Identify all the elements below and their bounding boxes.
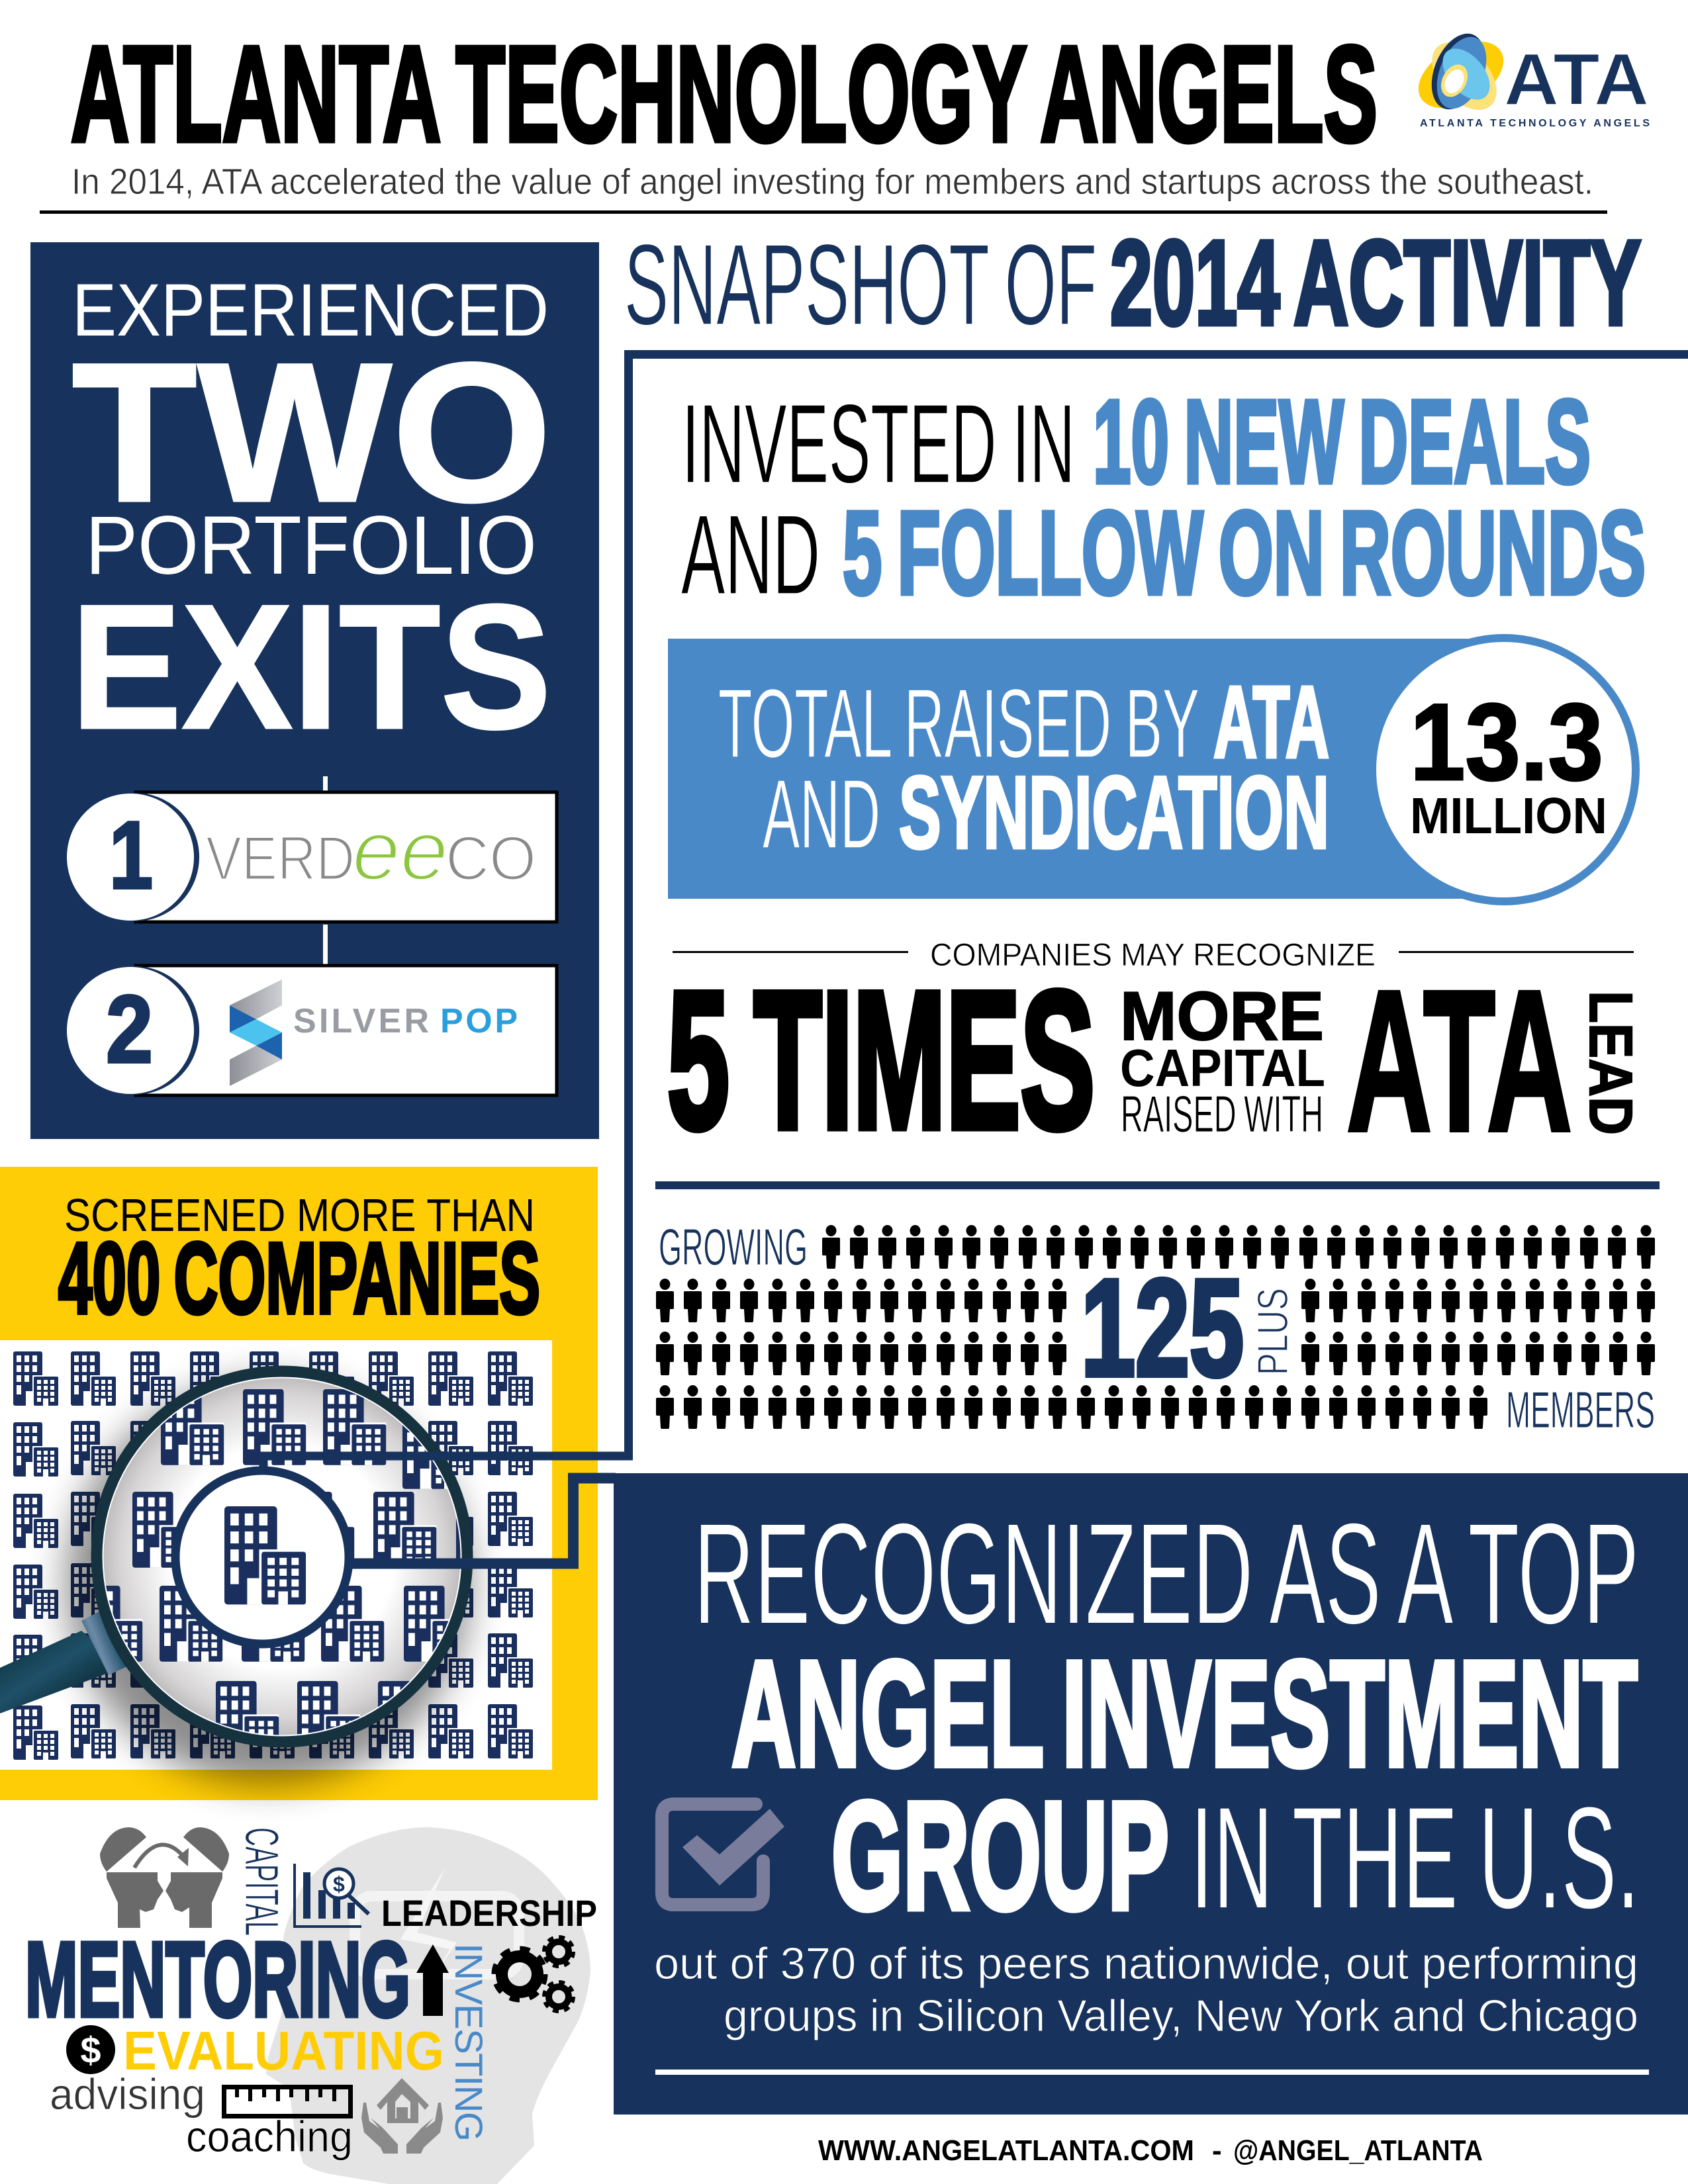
heading: screened more than 400 companies: SCREENED MORE THAN xyxy=(64,1189,535,1241)
exit 1: Verdeeco: VERD xyxy=(206,823,355,893)
connector: frame to magnifier xyxy=(263,355,1688,1473)
magnifying glass xyxy=(0,1371,519,1785)
icon: ruler xyxy=(224,2087,351,2116)
band: total raised: ATA xyxy=(1213,665,1329,779)
icon: dollar coin xyxy=(66,2025,115,2074)
pictogram: growing 125 plus members: GROWING xyxy=(659,1218,808,1276)
icon: checkbox xyxy=(662,1804,784,1905)
word cloud: mentoring: EVALUATING xyxy=(123,2020,444,2081)
people row 3 xyxy=(656,1332,1655,1375)
subtitle: In 2014, ATA accelerated the value of angel investing for members and startups across the southeast. xyxy=(71,161,1593,202)
icon: two heads exchange xyxy=(100,1827,229,1928)
footer: @ANGEL_ATLANTA xyxy=(1233,2134,1483,2167)
stat: 13.3 million: 13.3 xyxy=(1410,681,1603,803)
icon: chart with dollar magnifier: $ xyxy=(333,1872,345,1896)
word cloud: mentoring: INVESTING xyxy=(447,1943,490,2142)
heading: experienced two portfolio exits: EXPERIENCED xyxy=(72,269,549,351)
exit 2: Silverpop: SILVER xyxy=(293,1002,429,1040)
connector: lens to recognition panel xyxy=(344,1479,616,1563)
stat: 5 times more capital: CAPITAL xyxy=(1120,1038,1325,1097)
panel: recognized as a top angel investment group xyxy=(614,1473,1688,2115)
icon: head silhouette xyxy=(266,1827,590,2184)
logo: ATA: ATLANTA TECHNOLOGY ANGELS xyxy=(1420,118,1650,129)
logo: ATA: ATA xyxy=(1504,39,1649,120)
pictogram: growing 125 plus members xyxy=(656,1218,1655,1439)
panel: screened companies xyxy=(0,1167,598,1800)
people row 1 xyxy=(822,1225,1655,1269)
panel: two portfolio exits xyxy=(30,242,599,1139)
icon: dollar coin: $ xyxy=(80,2029,101,2071)
pictogram: growing 125 plus members: PLUS xyxy=(1248,1288,1297,1375)
panel: recognized as a top angel investment group: out of 370 of its peers nationwide, out performing xyxy=(654,1938,1638,1989)
stat: 5 times more capital: COMPANIES MAY RECOGNIZE xyxy=(930,938,1376,973)
panel: recognized as a top angel investment group: groups in Silicon Valley, New York and Chicago xyxy=(724,1991,1638,2041)
logo: ATA xyxy=(1407,26,1650,129)
people row 4 xyxy=(656,1385,1487,1429)
stat: 13.3 million: MILLION xyxy=(1410,788,1607,844)
heading: snapshot of 2014 activity: SNAPSHOT OF xyxy=(624,220,1097,349)
icon: gears xyxy=(494,1937,573,2011)
word cloud: mentoring: advising xyxy=(50,2070,205,2118)
heading: experienced two portfolio exits xyxy=(71,269,552,766)
text: invested in new deals and follow on rounds: AND xyxy=(681,492,820,618)
word cloud: mentoring: LEADERSHIP xyxy=(381,1892,597,1934)
exit 2: Silverpop: POP xyxy=(440,1002,518,1040)
exit 2: Silverpop xyxy=(67,966,557,1095)
footer: WWW.ANGELATLANTA.COM xyxy=(818,2134,1194,2167)
building grid xyxy=(13,1351,533,1760)
band: total raised: SYNDICATION xyxy=(899,755,1329,870)
heading: experienced two portfolio exits: TWO xyxy=(71,321,552,543)
icon: chart with dollar magnifier xyxy=(295,1864,369,1927)
panel: recognized as a top angel investment group: GROUP xyxy=(831,1770,1169,1942)
word cloud: mentoring: MENTORING xyxy=(25,1920,410,2038)
footer xyxy=(818,2134,1483,2167)
icon: house in hands xyxy=(361,2078,443,2154)
footer: - xyxy=(1212,2134,1222,2167)
word cloud: mentoring: CAPITAL xyxy=(235,1827,287,1936)
heading: experienced two portfolio exits: PORTFOLIO xyxy=(85,500,537,592)
stat: 5 times more capital: RAISED WITH xyxy=(1121,1085,1323,1143)
exit 1: Verdeeco xyxy=(67,792,557,922)
heading: screened more than 400 companies: 400 COMPANIES xyxy=(58,1222,540,1335)
exit 1: Verdeeco: CO xyxy=(445,823,536,893)
people row 2 xyxy=(656,1279,1655,1322)
heading: experienced two portfolio exits: EXITS xyxy=(71,567,551,766)
band: total raised: TOTAL RAISED BY xyxy=(718,669,1199,778)
heading: screened more than 400 companies xyxy=(58,1189,540,1335)
band: total raised: AND xyxy=(763,760,880,869)
exit 2: Silverpop: 2 xyxy=(106,976,153,1083)
icon: up arrow xyxy=(416,1944,449,2016)
pictogram: growing 125 plus members: 125 xyxy=(1081,1251,1244,1405)
band: total raised xyxy=(668,634,1640,905)
exit 1: Verdeeco: ee xyxy=(352,803,448,898)
text: invested in new deals and follow on rounds xyxy=(681,375,1646,619)
stat: 5 times more capital: 5 TIMES xyxy=(667,950,1095,1169)
stat: 5 times more capital: LEAD xyxy=(1577,991,1644,1135)
exit 1: Verdeeco: 1 xyxy=(109,801,153,909)
icon: lens focus building xyxy=(175,1471,349,1644)
word cloud: mentoring: coaching xyxy=(186,2112,353,2161)
word cloud: mentoring xyxy=(25,1827,597,2184)
text: invested in new deals and follow on rounds: INVESTED IN xyxy=(682,381,1075,507)
stat: 5 times more capital: MORE xyxy=(1120,978,1324,1055)
